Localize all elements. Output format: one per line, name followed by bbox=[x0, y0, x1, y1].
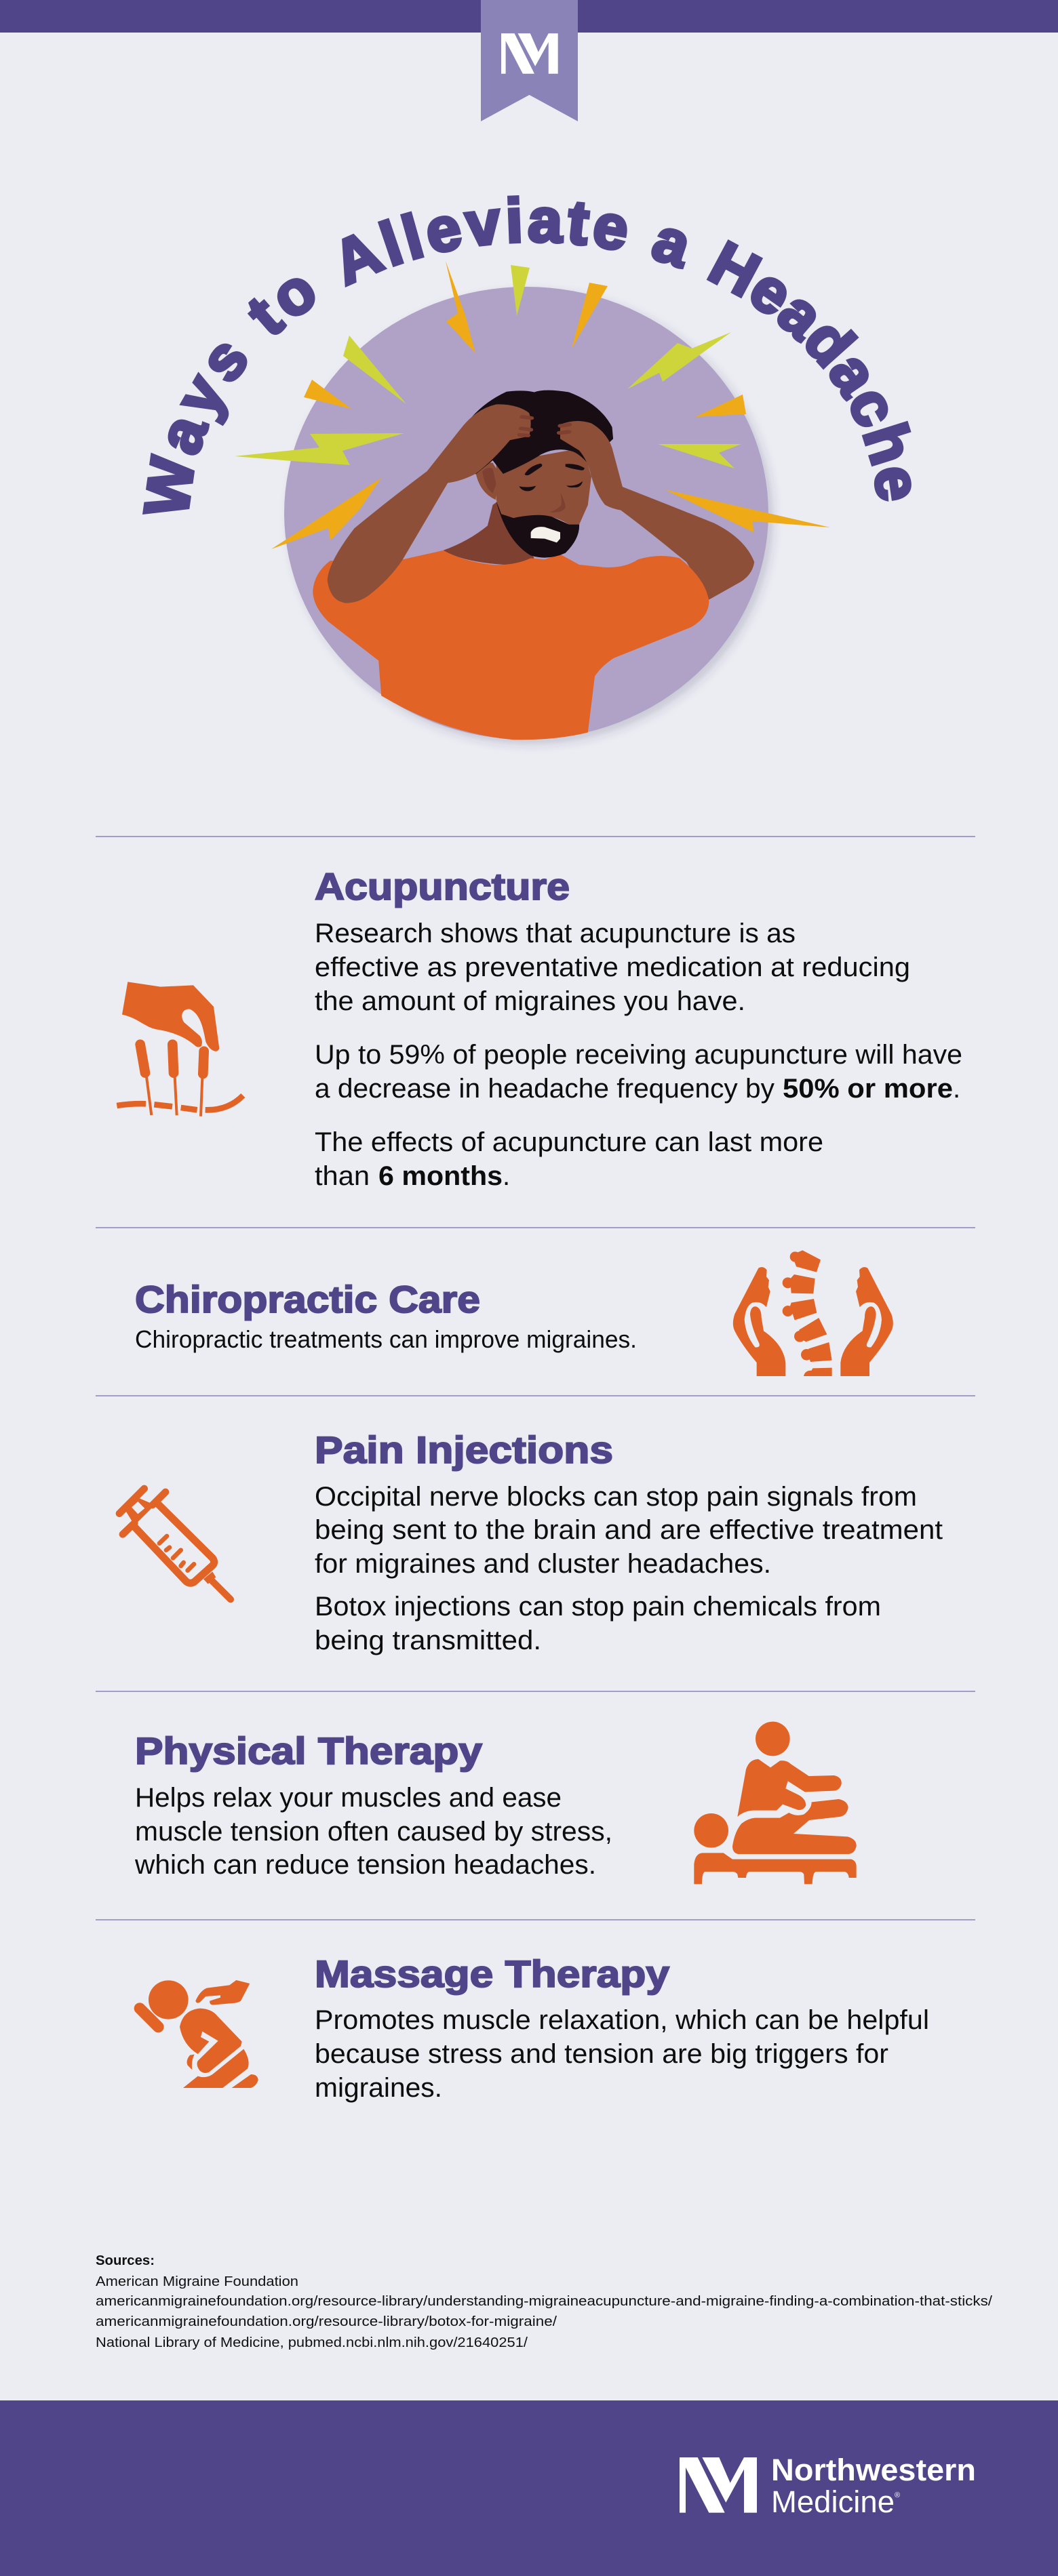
body text: the amount of migraines you have. bbox=[315, 986, 745, 1016]
icon: hands and spine bbox=[733, 1250, 893, 1376]
teeth bbox=[531, 527, 560, 542]
body text: 50% or more bbox=[783, 1074, 953, 1104]
panel: chiropractic care bbox=[135, 1250, 893, 1376]
purple oval background bbox=[284, 287, 768, 740]
body text: The effects of acupuncture can last more bbox=[315, 1127, 823, 1157]
hair bbox=[471, 390, 613, 475]
body text: 6 months bbox=[378, 1161, 503, 1191]
sources: National Library of Medicine, pubmed.ncbi.nlm.nih.gov/21640251/ bbox=[96, 2335, 528, 2350]
body text: for migraines and cluster headaches. bbox=[315, 1549, 771, 1579]
body text: effective as preventative medication at reducing bbox=[315, 952, 910, 982]
sources: americanmigrainefoundation.org/resource-library/botox-for-migraine/ bbox=[96, 2314, 557, 2329]
panel: pain injections bbox=[119, 1428, 943, 1655]
icon: massage bbox=[140, 1980, 258, 2088]
body text bbox=[315, 919, 962, 1191]
sources bbox=[96, 2253, 992, 2350]
body text: because stress and tension are big triggers for bbox=[315, 2039, 888, 2069]
body text: migraines. bbox=[315, 2073, 442, 2103]
body text bbox=[315, 2005, 929, 2103]
body text: being sent to the brain and are effective treatment bbox=[315, 1515, 943, 1545]
panel: physical therapy bbox=[134, 1722, 857, 1884]
sources: Sources: bbox=[96, 2253, 155, 2268]
sources: American Migraine Foundation bbox=[96, 2274, 298, 2289]
top banner bar bbox=[0, 0, 1058, 33]
man figure bbox=[313, 390, 754, 740]
knuckles bbox=[520, 417, 570, 435]
footer wordmark: Northwestern bbox=[771, 2453, 976, 2487]
body text: Chiropractic treatments can improve migraines. bbox=[135, 1325, 637, 1353]
lightning bolts bbox=[235, 261, 830, 549]
body text: muscle tension often caused by stress, bbox=[135, 1817, 612, 1847]
body text: being transmitted. bbox=[315, 1626, 541, 1655]
title on arc: Ways to Alleviate a Headache bbox=[142, 195, 912, 515]
footer band bbox=[0, 2400, 1058, 2576]
body text: Botox injections can stop pain chemicals from bbox=[315, 1592, 881, 1622]
eyes and brows bbox=[519, 464, 585, 491]
body text: Helps relax your muscles and ease bbox=[135, 1783, 562, 1813]
icon: hand with needles bbox=[117, 982, 243, 1116]
body text: Up to 59% of people receiving acupuncture will have bbox=[315, 1040, 962, 1070]
body text: Promotes muscle relaxation, which can be helpful bbox=[315, 2005, 929, 2035]
nose bbox=[550, 492, 566, 512]
footer wordmark: ® bbox=[895, 2491, 900, 2499]
shirt bbox=[313, 550, 709, 740]
heading: Acupuncture bbox=[315, 865, 570, 908]
panel: acupuncture bbox=[117, 865, 962, 1191]
body text bbox=[134, 1783, 612, 1880]
heading: Chiropractic Care bbox=[135, 1278, 480, 1321]
icon: syringe bbox=[119, 1489, 231, 1599]
neck bbox=[444, 500, 534, 565]
body text: . bbox=[503, 1161, 510, 1191]
right arm bbox=[560, 421, 754, 600]
heading: Massage Therapy bbox=[315, 1952, 669, 1995]
beard bbox=[496, 501, 579, 558]
body text: Research shows that acupuncture is as bbox=[315, 919, 796, 948]
icon: therapist and patient bbox=[694, 1722, 857, 1884]
left arm bbox=[328, 404, 531, 603]
body text: a decrease in headache frequency by bbox=[315, 1074, 775, 1104]
illustration: man with headache bbox=[235, 261, 830, 740]
body text: which can reduce tension headaches. bbox=[134, 1850, 596, 1880]
heading: Physical Therapy bbox=[135, 1729, 482, 1772]
footer wordmark: Medicine bbox=[771, 2484, 895, 2519]
body text: . bbox=[953, 1074, 960, 1104]
ear bbox=[475, 462, 500, 500]
body text: Occipital nerve blocks can stop pain signals from bbox=[315, 1482, 917, 1512]
body text: than bbox=[315, 1161, 370, 1191]
ribbon with NM logo bbox=[481, 0, 578, 121]
sources: americanmigrainefoundation.org/resource-library/understanding-migraineacupuncture-and-migraine-finding-a-combination-that-sticks/ bbox=[96, 2293, 992, 2309]
body text bbox=[315, 1482, 943, 1655]
face bbox=[496, 448, 591, 525]
heading: Pain Injections bbox=[315, 1428, 613, 1471]
footer wordmark bbox=[771, 2453, 976, 2519]
footer logo mark bbox=[680, 2457, 757, 2513]
divider lines bbox=[96, 837, 975, 1920]
panel: massage therapy bbox=[140, 1952, 929, 2103]
